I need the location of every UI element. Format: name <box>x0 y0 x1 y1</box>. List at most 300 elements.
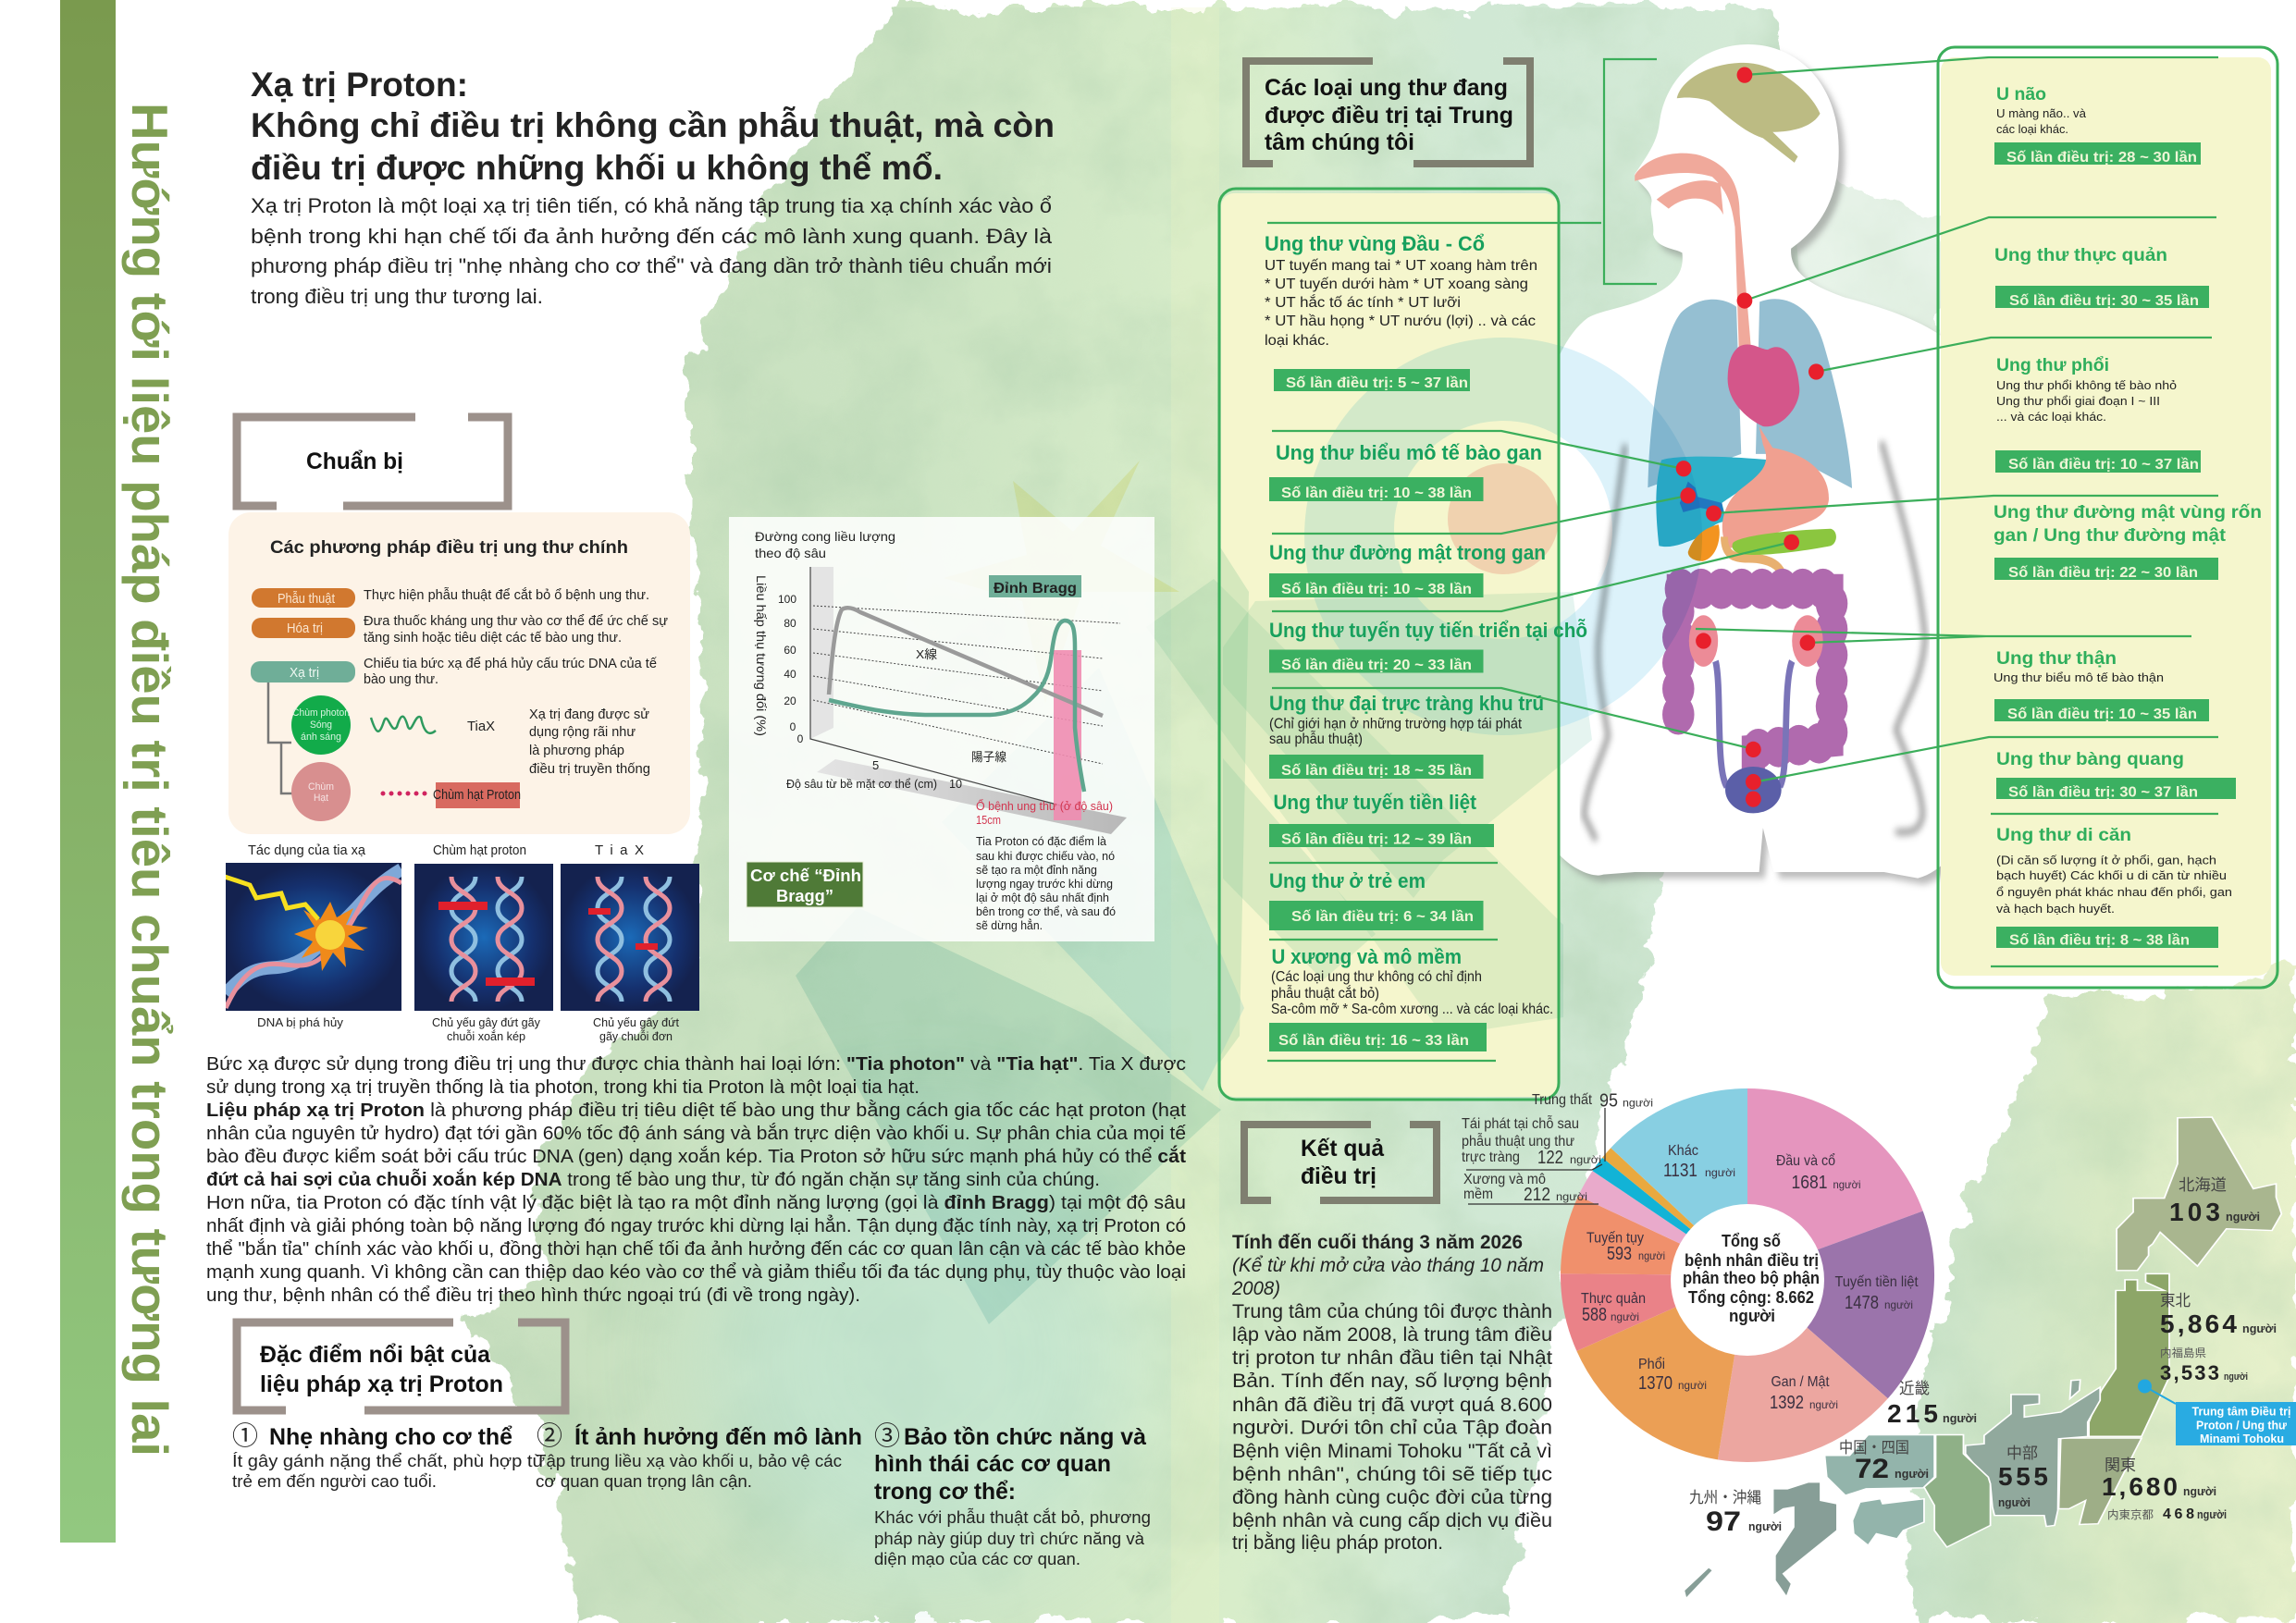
treatment descriptions: Thực hiện phẫu thuật để cắt bỏ ổ bệnh ung thư. <box>364 587 649 603</box>
pie hub text: Tổng cộng: 8.662 <box>1688 1288 1814 1307</box>
map of Japan <box>1684 1117 2281 1599</box>
image labels: T i a X <box>595 842 644 858</box>
entry: hilar bile duct cancer <box>1994 503 2262 581</box>
label: Chubu: người <box>1998 1495 2031 1509</box>
region: Hokkaido <box>2117 1117 2281 1271</box>
x axis labels: 10 <box>949 777 962 791</box>
pie labels: 1392 <box>1770 1393 1804 1413</box>
tumor depth label <box>976 799 1113 827</box>
entry: colorectal cancer: Số lần điều trị: 18 ~ 35 lần <box>1281 763 1472 779</box>
image: proton beam DNA <box>414 864 553 1011</box>
entry: metastatic cancer: ổ nguyên phát khác nhau đến phổi, gan <box>1996 885 2232 899</box>
intro paragraph <box>251 194 1053 308</box>
entry: esophageal cancer: Ung thư thực quản <box>1994 246 2167 265</box>
label: Bragg mechanism: Bragg” <box>776 886 833 905</box>
feature 1 <box>232 1421 545 1491</box>
y axis ticks: 100 <box>778 593 796 606</box>
y axis ticks: 20 <box>784 695 796 707</box>
feature 2: cơ quan quan trọng lân cận. <box>536 1471 752 1491</box>
callout: Minami Tohoku center <box>2176 1402 2296 1445</box>
organ: airway and esophagus <box>1635 154 1751 347</box>
entry: bone and soft tissue tumors: Số lần điều trị: 16 ~ 33 lần <box>1278 1033 1469 1049</box>
y axis label: Liều hấp thụ tương đối (%) <box>754 575 769 736</box>
entry: head and neck cancer: * UT hắc tố ác tính * UT lưỡi <box>1265 293 1461 311</box>
proton beam label <box>433 782 521 808</box>
label: Tohoku: 5,864 <box>2160 1309 2237 1338</box>
body text: proton therapy explanation: mạnh xung quanh. Vì không cần can thiệp dao kéo vào cơ thể và giảm thiểu tối đa tác dụng phụ, tùy thuộc vào loại <box>206 1262 1186 1283</box>
organ: gallbladder <box>1688 524 1720 561</box>
pie hub text: bệnh nhân điều trị <box>1685 1251 1819 1270</box>
organ: duodenum <box>1724 536 1784 576</box>
chart title: Đường cong liều lượng <box>755 529 895 544</box>
note: traditional radiotherapy: điều trị truyền thống <box>529 761 650 777</box>
heading: Chuẩn bị: Chuẩn bị <box>306 449 403 474</box>
feature 3: Bảo tồn chức năng và <box>904 1424 1146 1450</box>
entry: brain tumor <box>1994 85 2201 166</box>
entry: kidney cancer: Ung thư thận <box>1996 649 2117 669</box>
organ: liver <box>1656 457 1771 547</box>
x axis labels <box>786 758 962 791</box>
results paragraph: Bản. Tính đến nay, số lượng bệnh <box>1232 1371 1552 1392</box>
chart dose gridlines <box>813 606 1120 764</box>
callout: rectal recurrence <box>1462 1116 1601 1168</box>
feature 3: Khác với phẫu thuật cắt bỏ, phương <box>874 1507 1151 1527</box>
results paragraph: bệnh nhân", chúng tôi sẽ tiếp tục <box>1232 1464 1552 1485</box>
pie labels: Đầu và cổ <box>1776 1153 1835 1169</box>
label: Chubu: 中部 <box>2006 1445 2038 1462</box>
image captions: Chủ yếu gây đứt gãy <box>432 1015 540 1029</box>
region: Okinawa <box>1684 1568 1713 1599</box>
results paragraph: Trung tâm của chúng tôi được thành <box>1232 1301 1552 1322</box>
pie labels: Tuyến tiền liệt <box>1835 1274 1919 1290</box>
entry: pancreatic cancer: Số lần điều trị: 20 ~ 33 lần <box>1281 658 1472 673</box>
Bragg explanation: lượng ngay trước khi dừng <box>976 878 1113 891</box>
pie labels: 588 <box>1582 1305 1607 1325</box>
heading: Chuẩn bị <box>237 417 508 506</box>
label: Kyushu Okinawa: 97 <box>1706 1506 1741 1537</box>
label: Chubu: 555 <box>1998 1462 2048 1491</box>
tumor depth bar <box>1054 650 1081 820</box>
callout: Minami Tohoku center: Minami Tohoku <box>2200 1432 2284 1445</box>
label: Chubu <box>1998 1445 2048 1509</box>
heading: cancer types treated <box>1246 61 1530 164</box>
label: Kinki: 近畿 <box>1899 1380 1930 1397</box>
intro paragraph: Xạ trị Proton là một loại xạ trị tiên tiến, có khả năng tập trung tia xạ chính xác vào ổ <box>251 194 1052 217</box>
panel: Bragg peak chart <box>729 517 1154 941</box>
panel: main cancer treatments <box>228 512 690 834</box>
pill: surgery <box>252 588 355 608</box>
heading: cancer types treated: Các loại ung thư đang <box>1265 75 1508 101</box>
Bragg explanation: sẽ dừng hẳn. <box>976 918 1043 932</box>
feature 3: pháp này giúp duy trì chức năng và <box>874 1529 1145 1548</box>
label: Kyushu Okinawa <box>1689 1489 1782 1537</box>
y axis ticks: 80 <box>784 617 796 630</box>
map labels <box>1689 1176 2296 1537</box>
label: Kanto: 468 <box>2163 1506 2194 1522</box>
feature 1: ① <box>232 1421 258 1450</box>
pie labels: Phổi <box>1638 1357 1665 1372</box>
intro paragraph: bệnh trong khi hạn chế tối đa ảnh hưởng đến các mô lành xung quanh. Đây là <box>251 225 1053 248</box>
body text: proton therapy explanation: ung thư, bệnh nhân có thể điều trị theo hình thức ngoại trú (đi về trong ngày). <box>206 1285 860 1306</box>
callout: bone and soft tissue: Xương và mô <box>1463 1172 1546 1187</box>
marker: proton center location <box>2138 1380 2176 1404</box>
note: traditional radiotherapy: Xạ trị đang được sử <box>529 707 649 722</box>
pie hub text <box>1683 1232 1820 1325</box>
curve labels: X線 <box>916 647 937 661</box>
image labels <box>248 842 644 858</box>
region: Chugoku <box>1825 1434 1934 1495</box>
label: Hokkaido: người <box>2226 1210 2260 1223</box>
pie labels: 1370 <box>1638 1373 1673 1394</box>
organ: kidneys <box>1689 615 1823 667</box>
main heading: Xạ trị Proton: <box>251 66 468 104</box>
entry: lung cancer: Ung thư phổi giai đoạn I ~ III <box>1996 394 2160 408</box>
results paragraph: Bệnh viện Minami Tohoku "Tất cả vì <box>1232 1441 1552 1462</box>
results paragraph <box>1231 1232 1552 1554</box>
pie labels: người <box>1678 1379 1707 1392</box>
entry: pediatric cancer <box>1269 869 1484 930</box>
entry: bladder cancer: Số lần điều trị: 30 ~ 37 lần <box>2008 784 2198 801</box>
label: Bragg mechanism: Cơ chế “Đỉnh <box>750 866 861 885</box>
callout: bone and soft tissue: mềm <box>1463 1187 1493 1202</box>
pie labels: người <box>1611 1310 1639 1323</box>
image captions: DNA bị phá hủy <box>257 1015 344 1029</box>
callout: mediastinum: người <box>1623 1097 1653 1110</box>
label: Hokkaido: 北海道 <box>2179 1176 2227 1194</box>
entry: lung cancer: ... và các loại khác. <box>1996 410 2106 424</box>
label: Chugoku Shikoku: 中国・四国 <box>1839 1439 1909 1457</box>
entry: intrahepatic bile duct cancer: Ung thư đường mật trong gan <box>1269 541 1546 564</box>
results paragraph: nhân đã điều trị đã vượt quá 8.600 <box>1232 1395 1552 1416</box>
treatment descriptions <box>364 587 668 687</box>
tumor depth label: Ổ bệnh ung thư (ở độ sâu) <box>976 799 1113 813</box>
entry: esophageal cancer: Số lần điều trị: 30 ~ 35 lần <box>2009 293 2199 309</box>
pie labels: 593 <box>1607 1244 1632 1264</box>
entry: head and neck cancer: loại khác. <box>1265 333 1329 349</box>
image: DNA damage burst <box>225 863 401 1011</box>
label: Kyushu Okinawa: 九州・沖縄 <box>1689 1489 1761 1506</box>
Bragg explanation <box>976 835 1116 932</box>
entry: bone and soft tissue tumors: Sa-côm mỡ * Sa-côm xương ... và các loại khác. <box>1271 1002 1553 1017</box>
organ: bile duct <box>1680 482 1723 512</box>
entry: metastatic cancer <box>1996 826 2232 949</box>
curve: X-ray <box>829 608 1103 716</box>
main heading <box>251 66 1055 187</box>
pill: chemotherapy: Hóa trị <box>287 621 323 636</box>
chart title: theo độ sâu <box>755 546 826 560</box>
chart title <box>755 529 895 560</box>
label: Kanto: 内東京都 <box>2107 1508 2154 1521</box>
entry: bone and soft tissue tumors: (Các loại ung thư không có chỉ định <box>1271 969 1482 985</box>
treatment descriptions: Chiếu tia bức xạ để phá hủy cấu trúc DNA của tế <box>364 656 658 671</box>
curve: proton <box>829 621 1084 792</box>
label: Bragg mechanism <box>747 862 863 907</box>
label: Kanto: người <box>2183 1484 2216 1498</box>
entry: kidney cancer <box>1994 649 2209 722</box>
curve labels: 陽子線 <box>971 750 1006 764</box>
x axis labels: 5 <box>872 758 879 772</box>
particle beam circle: Hạt <box>314 793 328 804</box>
results paragraph: (Kể từ khi mở cửa vào tháng 10 năm <box>1232 1255 1544 1276</box>
entry: pancreatic cancer <box>1269 619 1587 673</box>
feature 3: diện mạo của các cơ quan. <box>874 1549 1080 1568</box>
organ: brain <box>1677 63 1821 163</box>
panel border right <box>1938 47 2277 988</box>
label: Chugoku Shikoku: người <box>1895 1467 1929 1481</box>
entry: metastatic cancer: Ung thư di căn <box>1996 826 2131 845</box>
entry: lung cancer <box>1995 356 2201 473</box>
organ: bladder <box>1725 767 1782 813</box>
treatment descriptions: bào ung thư. <box>364 671 438 687</box>
photon beam circle: Sóng <box>310 719 332 731</box>
callout: rectal recurrence: phẫu thuật ung thư <box>1462 1134 1574 1150</box>
label: Kanto <box>2102 1457 2227 1522</box>
label: Hokkaido: 103 <box>2169 1198 2220 1226</box>
organ: colon <box>1678 589 1832 779</box>
image labels: Chùm hạt proton <box>433 842 526 858</box>
feature 2: Ít ảnh hưởng đến mô lành <box>574 1423 862 1450</box>
image: X-ray DNA <box>561 864 699 1011</box>
entry: lung cancer: Ung thư phổi không tế bào nhỏ <box>1996 378 2177 392</box>
label: TiaX: TiaX <box>467 719 495 734</box>
feature 2: Tập trung liều xạ vào khối u, bảo vệ các <box>536 1451 842 1470</box>
pie labels: người <box>1833 1178 1861 1191</box>
entry: head and neck cancer <box>1265 232 1537 391</box>
vertical title: Hướng tới liệu pháp điều trị tiêu chuẩn trong tương lai <box>121 103 179 1457</box>
label: Tohoku: 東北 <box>2160 1292 2191 1309</box>
image captions: chuỗi xoắn kép <box>447 1029 525 1043</box>
label: Tohoku: 内福島県 <box>2160 1346 2206 1359</box>
pie hub text: phân theo bộ phận <box>1683 1269 1820 1287</box>
panel: treatment list background right <box>1941 57 2271 976</box>
entry: hilar bile duct cancer: Ung thư đường mật vùng rốn <box>1994 503 2262 523</box>
tumor site markers <box>1676 67 1824 807</box>
image captions: gãy chuỗi đơn <box>599 1029 673 1043</box>
region: Sado island <box>2070 1380 2080 1399</box>
Bragg explanation: bên trong cơ thể, và sau đó <box>976 905 1116 918</box>
entry: bladder cancer <box>1996 750 2236 801</box>
label: Kinki: người <box>1943 1411 1977 1425</box>
entry: metastatic cancer: (Di căn số lượng ít ở phổi, gan, hạch <box>1996 853 2216 867</box>
region: Kyushu <box>1773 1482 1837 1597</box>
entry: colorectal cancer <box>1269 692 1544 779</box>
results: pie chart <box>1462 1088 1934 1462</box>
y axis ticks <box>778 593 804 745</box>
results paragraph: 2008) <box>1231 1278 1280 1299</box>
entry: lung cancer: Số lần điều trị: 10 ~ 37 lần <box>2008 457 2199 473</box>
body text: proton therapy explanation: sử dụng trong xạ trị truyền thống là tia photon, trong khi tia Proton là một loại tia hạt. <box>206 1077 920 1098</box>
entry: metastatic cancer: Số lần điều trị: 8 ~ 38 lần <box>2009 932 2190 949</box>
sidebar band <box>60 0 116 1543</box>
organ: ureters <box>1716 661 1792 786</box>
note: traditional radiotherapy <box>529 707 650 777</box>
wave icon <box>371 717 436 733</box>
treatment descriptions: tăng sinh hoặc tiêu diệt các tế bào ung thư. <box>364 630 622 646</box>
pill: chemotherapy <box>252 618 355 638</box>
label: Hokkaido <box>2169 1176 2260 1226</box>
y axis ticks: 0 <box>797 732 804 745</box>
Bragg explanation: lại ở một độ sâu nhất định <box>976 891 1109 904</box>
panel title: Các phương pháp điều trị ung thư chính <box>270 538 628 558</box>
feature 3: hình thái các cơ quan <box>874 1451 1111 1477</box>
feature 2: ② <box>537 1421 562 1450</box>
organs diagram <box>1635 63 1852 813</box>
pie labels: người <box>1705 1166 1735 1179</box>
label: Chugoku Shikoku: 72 <box>1855 1454 1889 1484</box>
entry: pediatric cancer: Ung thư ở trẻ em <box>1269 869 1426 892</box>
label: Chugoku Shikoku <box>1839 1439 1929 1484</box>
pie labels: Khác <box>1668 1143 1698 1159</box>
entry: kidney cancer: Ung thư biểu mô tế bào thận <box>1994 670 2164 684</box>
results paragraph: bệnh nhân và cung cấp dịch vụ điều <box>1232 1510 1552 1531</box>
heading: cancer types treated: được điều trị tại Trung <box>1265 103 1513 129</box>
pie callout lines <box>1466 1108 1605 1204</box>
heading: proton therapy features <box>237 1322 565 1410</box>
entry: lung cancer: Ung thư phổi <box>1996 356 2109 375</box>
callout: bone and soft tissue <box>1463 1172 1587 1205</box>
body text: proton therapy explanation: Hơn nữa, tia Proton có đặc tính vật lý đặc biệt là tạo ra một đỉnh năng lượng (gọi là đỉnh Bragg ) tại một độ sâu <box>206 1193 1186 1213</box>
entry: hepatocellular carcinoma <box>1269 441 1542 501</box>
pie labels: người <box>1638 1249 1665 1262</box>
pie labels: Tuyến tụy <box>1586 1231 1644 1247</box>
pie labels: người <box>1809 1398 1838 1411</box>
region: Shikoku <box>1853 1499 1924 1545</box>
body text: proton therapy explanation: thể "bắn tỉa" chính xác vào khối u, đồng thời hạn chế tối đa ảnh hưởng đến các cơ quan lân cận và các tế bào khỏe <box>206 1238 1186 1260</box>
body text: proton therapy explanation: nhất định và giải phóng toàn bộ năng lượng đó ngay trước khi dừng lại hẳn. Tận dụng đặc tính này, xạ trị Proton có <box>206 1214 1186 1236</box>
photon beam circle: Chùm photon <box>292 707 350 719</box>
connector tree <box>268 682 292 793</box>
pie labels: 1131 <box>1663 1161 1697 1181</box>
organ: heart <box>1728 345 1799 426</box>
callout: mediastinum <box>1532 1091 1653 1112</box>
label: Kanto: 1,680 <box>2102 1472 2178 1501</box>
main heading: Không chỉ điều trị không cần phẫu thuật, mà còn <box>251 106 1055 144</box>
body text: proton therapy explanation: Liệu pháp xạ trị Proton là phương pháp điều trị tiêu diệt tế bào ung thư bằng cách gia tốc các hạt proton (hạt <box>206 1100 1186 1121</box>
human body silhouette <box>1522 44 1977 884</box>
photon beam circle <box>291 695 351 755</box>
heading: proton therapy features: liệu pháp xạ trị Proton <box>260 1371 503 1397</box>
label: Kinki: 215 <box>1887 1399 1938 1428</box>
photon beam circle: ánh sáng <box>301 732 341 743</box>
organ: stomach <box>1722 426 1829 547</box>
treatment descriptions: Đưa thuốc kháng ung thư vào cơ thể để ức chế sự <box>364 613 668 629</box>
note: traditional radiotherapy: dụng rộng rãi như <box>529 724 636 740</box>
particle beam circle: Chùm <box>308 781 334 793</box>
label: Tohoku: 3,533 <box>2160 1361 2219 1384</box>
entry: head and neck cancer: Số lần điều trị: 5 ~ 37 lần <box>1286 375 1468 391</box>
proton beam label: Chùm hạt Proton <box>433 787 521 803</box>
pie labels <box>1581 1143 1919 1413</box>
heading: treatment results: điều trị <box>1301 1163 1376 1189</box>
pie labels: Thực quản <box>1581 1291 1646 1307</box>
label: Bragg peak: Đỉnh Bragg <box>994 581 1077 596</box>
x axis labels: Độ sâu từ bề mặt cơ thể (cm) <box>786 777 937 791</box>
callout: bone and soft tissue: 212 <box>1524 1185 1550 1205</box>
Bragg explanation: sau khi được chiếu vào, nó <box>976 850 1115 863</box>
label: Tohoku: người <box>2224 1371 2248 1383</box>
callout: rectal recurrence: người <box>1570 1153 1601 1166</box>
entry: kidney cancer: Số lần điều trị: 10 ~ 35 lần <box>2007 707 2197 722</box>
entry: bone and soft tissue tumors <box>1269 945 1553 1051</box>
label: Tohoku <box>2160 1292 2277 1384</box>
label: Kanto: người <box>2197 1507 2227 1521</box>
callout: rectal recurrence: trực tràng <box>1462 1150 1520 1165</box>
entry: hilar bile duct cancer: Số lần điều trị: 22 ~ 30 lần <box>2008 565 2198 581</box>
results paragraph: trị bằng liệu pháp proton. <box>1232 1532 1443 1554</box>
callout: bone and soft tissue: người <box>1556 1190 1587 1203</box>
results paragraph: người. Dưới tôn chỉ của Tập đoàn <box>1232 1417 1552 1439</box>
connector lines to organs <box>1267 57 2218 1061</box>
note: traditional radiotherapy: là phương pháp <box>529 743 624 758</box>
results paragraph: trị proton tư nhân đầu tiên tại Nhật <box>1232 1347 1552 1369</box>
label: Kanto: 関東 <box>2105 1457 2136 1474</box>
feature 1: Ít gây gánh nặng thể chất, phù hợp từ <box>232 1451 545 1470</box>
entry: metastatic cancer: và hạch bạch huyết. <box>1996 902 2115 916</box>
entry: head and neck cancer: UT tuyến mang tai * UT xoang hàm trên <box>1265 258 1537 274</box>
heading: cancer types treated: tâm chúng tôi <box>1265 129 1414 155</box>
y axis ticks: 0 <box>790 720 796 733</box>
y axis ticks: 60 <box>784 644 796 657</box>
image captions <box>257 1015 679 1043</box>
entry: head and neck cancer: * UT tuyến dưới hàm * UT xoang sàng <box>1265 277 1528 292</box>
callout: Minami Tohoku center: Trung tâm Điều trị <box>2192 1404 2290 1419</box>
pie labels: người <box>1884 1298 1913 1311</box>
pill: radiotherapy <box>251 661 355 682</box>
panel: treatment list background left <box>1221 193 1558 1097</box>
entry: colorectal cancer: sau phẫu thuật) <box>1269 732 1363 747</box>
entry: prostate cancer: Số lần điều trị: 12 ~ 39 lần <box>1281 832 1472 847</box>
entry: prostate cancer: Ung thư tuyến tiền liệt <box>1273 791 1477 814</box>
chart axes <box>810 567 1064 806</box>
callout: mediastinum: 95 <box>1599 1091 1618 1112</box>
panel border left <box>1219 189 1559 1100</box>
proton dots <box>383 792 429 795</box>
label: Kinki <box>1887 1380 1977 1428</box>
entry: head and neck cancer: Ung thư vùng Đầu - Cổ <box>1265 232 1485 255</box>
Bragg explanation: sẽ tạo ra một đỉnh năng <box>976 864 1097 877</box>
callout: rectal recurrence: Tái phát tại chỗ sau <box>1462 1116 1579 1132</box>
pill: surgery: Phẫu thuật <box>278 591 336 607</box>
entry: intrahepatic bile duct cancer: Số lần điều trị: 10 ~ 38 lần <box>1281 582 1472 597</box>
entry: bone and soft tissue tumors: U xương và mô mềm <box>1271 945 1462 968</box>
entry: hepatocellular carcinoma: Số lần điều trị: 10 ~ 38 lần <box>1281 486 1472 501</box>
organ: lungs <box>1648 299 1852 488</box>
pie labels: Gan / Mật <box>1771 1374 1830 1390</box>
entry: brain tumor: các loại khác. <box>1996 122 2068 136</box>
entry: esophageal cancer <box>1994 246 2209 309</box>
entry: pediatric cancer: Số lần điều trị: 6 ~ 34 lần <box>1291 909 1474 925</box>
body text: proton therapy explanation: bào đều được kiểm soát bởi cấu trúc DNA (gen) dạng xoắn kép. Tia Proton sở hữu sức mạnh phá hủy có thể cắt <box>206 1145 1186 1167</box>
entry: metastatic cancer: bạch huyết) Các khối u di căn từ nhiều <box>1996 868 2227 882</box>
region: Tohoku <box>2089 1273 2169 1436</box>
curve labels <box>916 647 1006 764</box>
image captions: Chủ yếu gây đứt <box>593 1015 679 1029</box>
y axis ticks: 40 <box>784 668 796 681</box>
entry: hilar bile duct cancer: gan / Ung thư đường mật <box>1994 526 2227 546</box>
Bragg explanation: Tia Proton có đặc điểm là <box>976 835 1106 848</box>
results paragraph: lập vào năm 2008, là trung tâm điều <box>1232 1324 1552 1346</box>
background: watercolor wash <box>463 7 2296 1623</box>
intro paragraph: trong điều trị ung thư tương lai. <box>251 285 543 308</box>
heading: treatment results: Kết quả <box>1301 1136 1385 1162</box>
pie hub text: người <box>1729 1307 1775 1325</box>
results paragraph: Tính đến cuối tháng 3 năm 2026 <box>1232 1232 1523 1253</box>
feature 1: Nhẹ nhàng cho cơ thể <box>269 1424 512 1450</box>
watermark logo shapes <box>796 338 1702 1324</box>
pie hub <box>1671 1204 1824 1356</box>
entry: brain tumor: U não <box>1996 85 2046 105</box>
label: Bragg peak <box>989 575 1081 597</box>
